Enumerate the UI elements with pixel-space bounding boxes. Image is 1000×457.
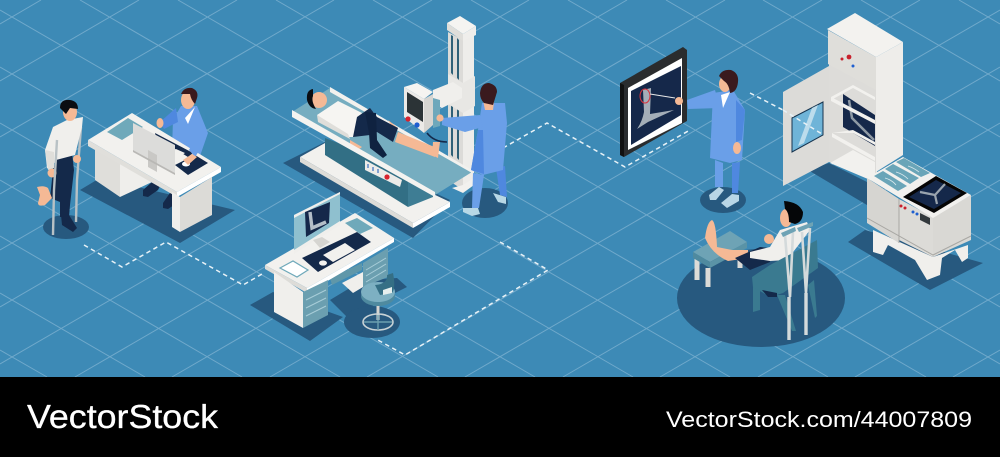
table top: [292, 88, 472, 195]
table front rail: [292, 110, 435, 197]
dashed line on window: [783, 110, 822, 134]
centre drawer: [330, 263, 362, 285]
shadow: [808, 163, 877, 205]
screen: [903, 176, 967, 213]
desk top: [88, 113, 221, 197]
red highlight: [640, 89, 650, 103]
desk mat: [302, 232, 371, 272]
crutch right: [76, 127, 81, 222]
shirt: [45, 117, 83, 170]
keyboard and mouse pad: [155, 133, 208, 175]
patient lying on table: [307, 89, 440, 158]
chair: [752, 240, 818, 331]
cabinet interior: [829, 62, 877, 175]
film processor: [848, 157, 983, 290]
head: [63, 103, 77, 121]
door window: [792, 102, 823, 152]
ankle bone: [637, 88, 674, 129]
document folder: [107, 118, 143, 140]
computer monitor: [133, 123, 175, 175]
control buttons: [900, 204, 930, 225]
cabinet top: [827, 13, 903, 57]
folder: [345, 218, 373, 234]
crutch left: [53, 140, 57, 235]
mouse: [319, 260, 327, 266]
footer bar: [0, 377, 1000, 457]
bare leg: [705, 220, 748, 261]
table control panel: [365, 160, 402, 187]
head: [780, 209, 792, 227]
table pedestal: [325, 138, 433, 207]
trousers: [735, 247, 770, 270]
top surface: [867, 157, 971, 218]
doctor at viewer: [675, 70, 746, 213]
x-ray arm: [433, 82, 462, 128]
cabinet drawer: [828, 30, 876, 90]
technician: [436, 83, 508, 218]
desk pedestal left: [95, 147, 152, 197]
floor circle: [677, 249, 845, 347]
film: [631, 66, 681, 145]
doctor shoes: [143, 182, 174, 209]
clipboard: [280, 261, 308, 277]
cabinet side: [876, 42, 903, 172]
seated patient with crutches: [677, 201, 845, 347]
shelves: [830, 85, 875, 182]
desk top: [265, 213, 394, 293]
hands: [48, 155, 81, 178]
desk leg right: [172, 177, 212, 232]
station: x-ray table: [283, 16, 508, 238]
table back rail: [330, 87, 472, 173]
lifted bare foot: [37, 186, 52, 206]
left pedestal: [274, 272, 328, 328]
patient on crutches: [37, 100, 89, 239]
cable: [427, 133, 447, 142]
white lightbox: [628, 58, 682, 150]
shadow: [848, 230, 983, 290]
body: [867, 178, 899, 243]
right pedestal: [342, 248, 388, 293]
floor spot: [43, 215, 89, 239]
x-ray column: [447, 16, 476, 193]
dashed connector path: [84, 93, 783, 355]
station: consultation desk: [80, 88, 235, 243]
desk shadow: [250, 292, 343, 341]
table base plate: [300, 143, 450, 228]
film cabinet: [783, 13, 903, 205]
trays: [874, 158, 930, 191]
monitor with x-ray: [294, 192, 340, 254]
open door: [783, 66, 829, 186]
footstool: [693, 231, 747, 287]
wall x-ray viewer: [620, 47, 687, 157]
doctor hand on mouse: [183, 131, 207, 165]
frame: [620, 47, 687, 157]
stool: [361, 273, 395, 330]
keyboard: [323, 243, 355, 262]
arm and shirt: [750, 222, 810, 261]
doctor in blue coat: [156, 88, 208, 156]
trousers: [50, 153, 74, 217]
station: viewing desk: [250, 192, 407, 341]
crutches: [785, 228, 810, 340]
brand wordmark: VectorStock: [27, 398, 219, 435]
stored x-ray film: [843, 94, 875, 146]
desk shadow: [80, 178, 235, 243]
table shadow: [283, 142, 450, 238]
feet: [873, 230, 968, 280]
pointer: [650, 94, 675, 98]
x-ray control head: [404, 83, 433, 133]
image id: VectorStock.com/44007809: [666, 407, 972, 432]
